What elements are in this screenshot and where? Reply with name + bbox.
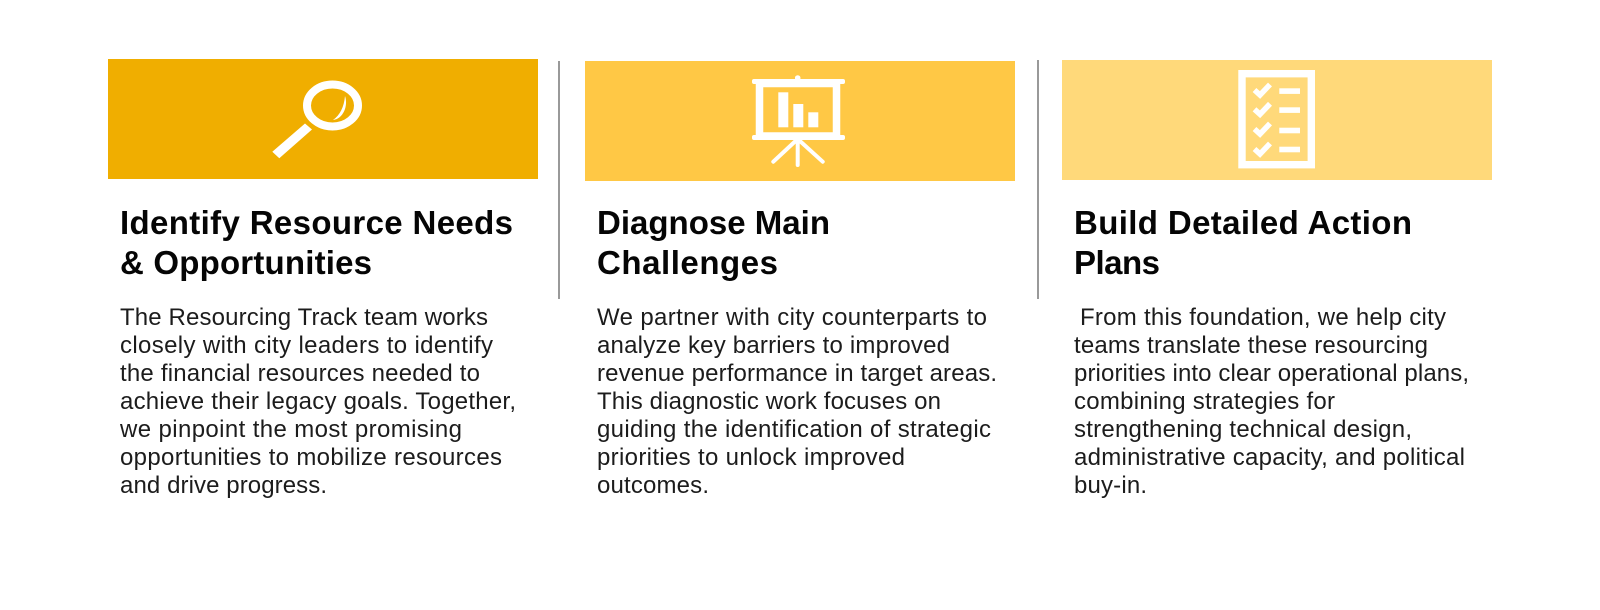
text block: diagnose: We partner with city counterparts to — [597, 304, 987, 331]
text block: identify: and drive progress. — [120, 472, 327, 499]
text block: identify: achieve their legacy goals. Together, — [120, 388, 516, 415]
panel: identify resource needs — [108, 59, 538, 499]
text block: diagnose: priorities to unlock improved — [597, 444, 905, 471]
text block: build: priorities into clear operational plans, — [1074, 360, 1469, 387]
text block: build: teams translate these resourcing — [1074, 332, 1428, 359]
header band: identify — [108, 59, 538, 179]
text block: build: strengthening technical design, — [1074, 416, 1412, 443]
text block: identify: closely with city leaders to identify — [120, 332, 493, 359]
icon: presentation board — [752, 75, 845, 165]
text block: diagnose — [597, 304, 997, 499]
header band: diagnose — [585, 61, 1015, 181]
text block: diagnose: revenue performance in target areas. — [597, 360, 997, 387]
text block: identify — [119, 304, 516, 499]
text block: diagnose: This diagnostic work focuses on — [597, 388, 941, 415]
header band: build — [1062, 60, 1492, 180]
heading: build: Build Detailed Action — [1074, 204, 1412, 241]
text block: build: From this foundation, we help city — [1080, 304, 1446, 331]
text block: build: buy-in. — [1074, 472, 1147, 499]
text block: diagnose: analyze key barriers to improved — [597, 332, 950, 359]
heading: identify — [120, 204, 513, 281]
icon: magnifying glass — [272, 84, 358, 158]
heading: identify: Identify Resource Needs — [120, 204, 513, 241]
icon: checklist — [1242, 74, 1311, 165]
text block: identify: the financial resources needed to — [120, 360, 480, 387]
text block: identify: we pinpoint the most promising — [119, 416, 462, 443]
heading: diagnose: Challenges — [597, 244, 778, 281]
panel: build detailed action plans — [1062, 60, 1492, 499]
heading: build: Plans — [1074, 244, 1160, 281]
heading: diagnose: Diagnose Main — [597, 204, 830, 241]
text block: diagnose: guiding the identification of strategic — [597, 416, 991, 443]
text block: diagnose: outcomes. — [597, 472, 709, 499]
panel: diagnose main challenges — [585, 61, 1015, 499]
text block: identify: The Resourcing Track team works — [120, 304, 488, 331]
text block: identify: opportunities to mobilize resources — [120, 444, 502, 471]
heading: build — [1074, 204, 1412, 281]
heading: diagnose — [597, 204, 830, 281]
text block: build: administrative capacity, and political — [1074, 444, 1465, 471]
heading: identify: & Opportunities — [120, 244, 372, 281]
text block: build — [1074, 304, 1469, 499]
text block: build: combining strategies for — [1074, 388, 1335, 415]
